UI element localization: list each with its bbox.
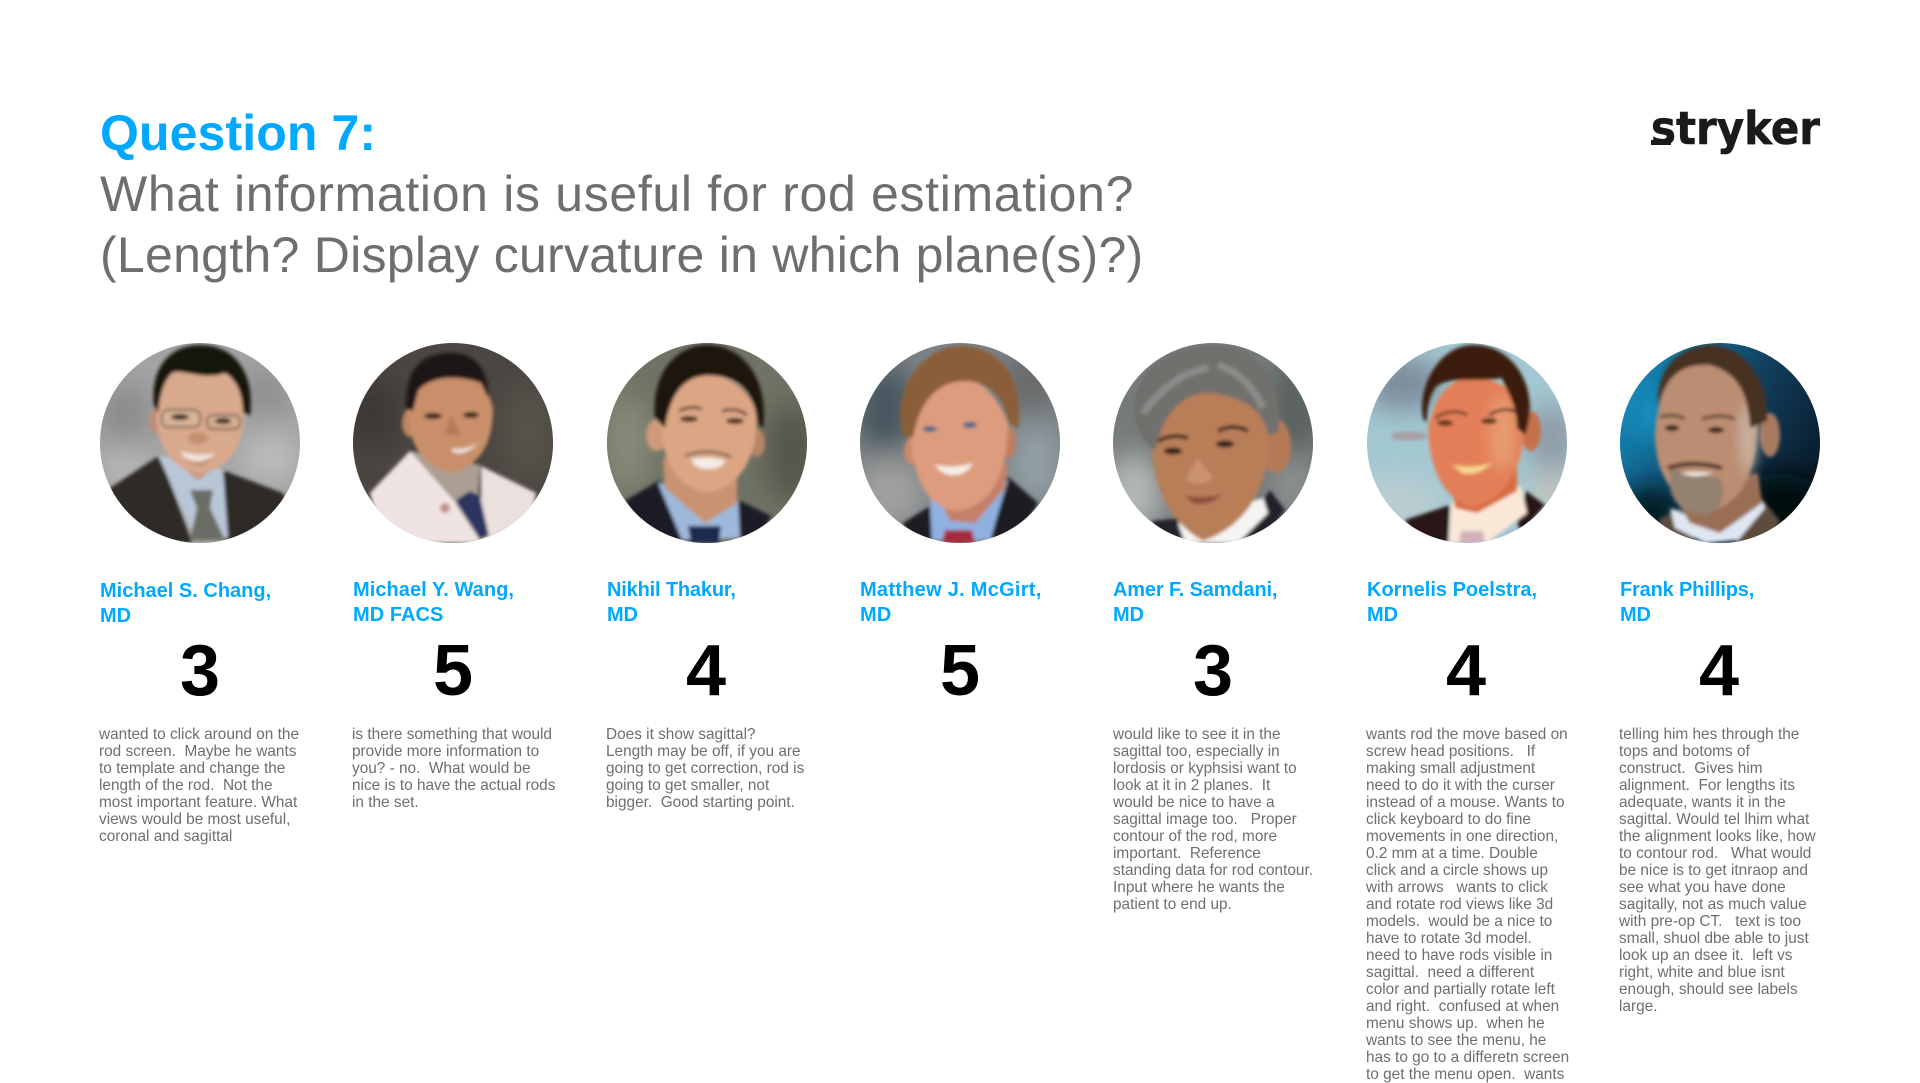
panel: Michael S. Chang (99, 343, 300, 844)
portrait: Matthew J. McGirt (860, 343, 1060, 543)
portrait: Michael S. Chang (100, 343, 300, 543)
panel: Frank Phillips (1619, 343, 1820, 1014)
comment text: Does it show sagittal? Length may be off, if you are going to get correction, rod is going to get smaller, not bigger. Good starting point. (606, 726, 804, 810)
comment text: telling him hes through the tops and botoms of construct. Gives him alignment. For lengths its adequate, wants it in the sagittal. Would tel lhim what the alignment looks like, how to contour rod. What would be nice is to get itnraop and see what you have done sagitally, not as much value with pre-op CT. text is too small, shuol dbe able to just look up an dsee it. left vs right, white and blue isnt enough, should see labels large. (1619, 726, 1816, 1014)
heading: question line 1: What information is useful for rod estimation? (100, 166, 1134, 222)
name: Matthew J. McGirt, MD (860, 579, 1042, 626)
heading: question line 2: (Length? Display curvature in which plane(s)?) (100, 227, 1143, 283)
portrait: Kornelis Poelstra (1367, 343, 1567, 543)
panel: Amer F. Samdani (1113, 343, 1313, 912)
name: Michael S. Chang, MD (100, 580, 271, 627)
heading: question number: Question 7: (100, 105, 376, 161)
name: Frank Phillips, MD (1620, 579, 1754, 626)
score: 3 (180, 631, 220, 711)
panel: Kornelis Poelstra (1366, 343, 1569, 1082)
comment text: wants rod the move based on screw head positions. If making small adjustment need to do it with the curser instead of a mouse. Wants to click keyboard to do fine movements in one direction, 0.2 mm at a time. Double click and a circle shows up with arrows wants to click and rotate rod views like 3d models. would be a nice to have to rotate 3d model. need to have rods visible in sagittal. need a different color and partially rotate left and right. confused at when menu shows up. when he wants to see the menu, he has to go to a differetn screen to get the menu open. wants (1366, 726, 1569, 1082)
name: Kornelis Poelstra, MD (1367, 579, 1537, 626)
comment text: is there something that would provide more information to you? - no. What would be nice is to have the actual rods in the set. (352, 726, 555, 810)
portrait: Michael Y. Wang (353, 343, 553, 543)
score: 4 (1699, 631, 1739, 711)
name: Amer F. Samdani, MD (1113, 579, 1277, 626)
score: 5 (433, 631, 473, 711)
panel: Matthew J. McGirt (860, 343, 1060, 711)
comment text: would like to see it in the sagittal too, especially in lordosis or kyphsisi want to look at it in 2 planes. It would be nice to have a sagittal image too. Proper contour of the rod, more important. Reference standing data for rod contour. Input where he wants the patient to end up. (1113, 726, 1313, 912)
score: 4 (1446, 631, 1486, 711)
name: Michael Y. Wang, MD FACS (353, 579, 514, 626)
portrait: Frank Phillips (1620, 343, 1820, 543)
panel: Nikhil Thakur (606, 343, 807, 810)
name: Nikhil Thakur, MD (607, 579, 736, 626)
portrait: Amer F. Samdani (1113, 343, 1313, 543)
panel: Michael Y. Wang (352, 343, 555, 810)
title block (100, 105, 1143, 283)
score: 3 (1193, 631, 1233, 711)
score: 4 (686, 631, 726, 711)
comment text: wanted to click around on the rod screen. Maybe he wants to template and change the length of the rod. Not the most important feature. What views would be most useful, coronal and sagittal (99, 726, 299, 844)
portrait: Nikhil Thakur (607, 343, 807, 543)
score: 5 (940, 631, 980, 711)
